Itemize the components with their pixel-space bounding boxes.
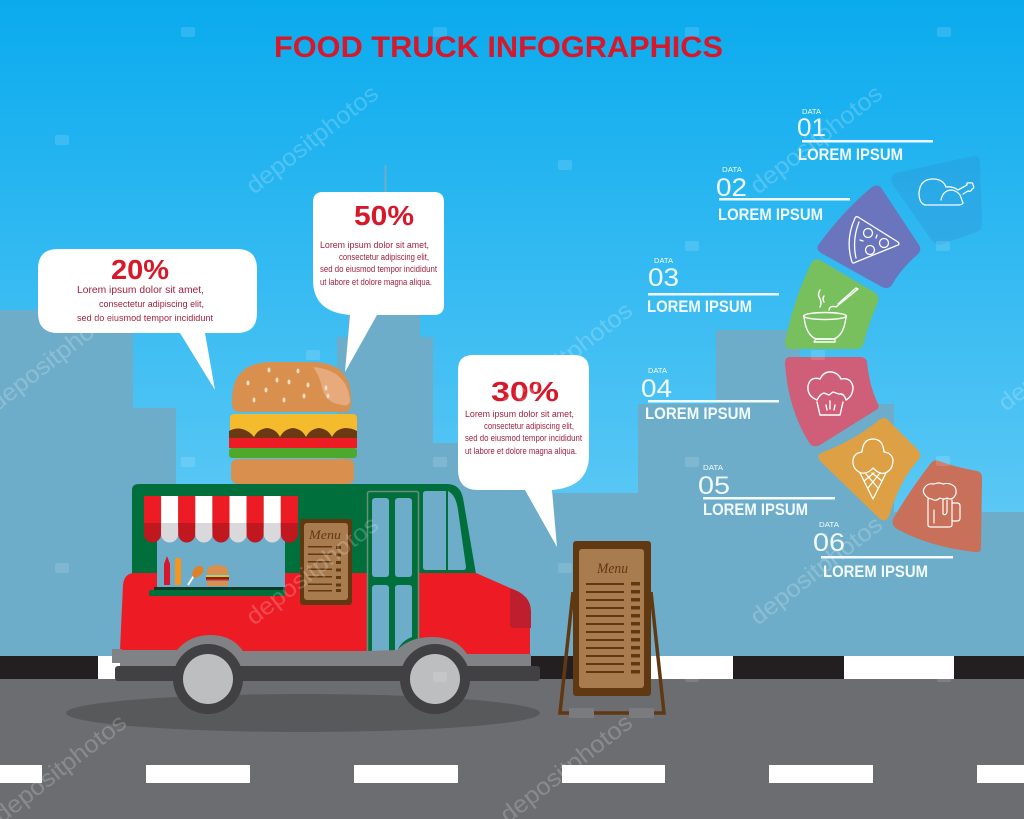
icon: soup bowl — [804, 288, 858, 342]
tail light — [510, 589, 531, 628]
callout: 30% — [458, 355, 589, 547]
data label 04: DATA — [648, 368, 667, 375]
callout: 20%: sed do eiusmod tempor incididunt — [77, 313, 213, 324]
callout: 50%: Lorem ipsum dolor sit amet, — [320, 240, 429, 251]
data label 06 — [813, 522, 953, 581]
sky background — [0, 0, 1024, 520]
sign feet — [569, 708, 654, 718]
data label 05: DATA — [703, 465, 723, 472]
callout: 30%: 30% — [491, 376, 559, 407]
cheese — [230, 414, 357, 438]
callout: 50%: consectetur adipiscing elit, — [339, 252, 429, 263]
callout: 30%: ut labore et dolore magna aliqua. — [465, 446, 577, 457]
icon: chicken — [919, 179, 974, 205]
food truck — [112, 484, 540, 714]
icon: ice cream — [853, 439, 893, 499]
giant burger on roof — [229, 362, 357, 484]
data label 01: LOREM IPSUM — [798, 145, 903, 164]
callout: 50%: sed do eiusmod tempor incididunt — [320, 264, 437, 275]
truck menu board — [300, 519, 352, 605]
data label 04: LOREM IPSUM — [645, 404, 751, 423]
road — [0, 679, 1024, 819]
petal: beer — [892, 460, 982, 552]
data label 02: 02 — [716, 174, 747, 202]
sandwich board menu — [560, 541, 664, 718]
data label 02: DATA — [722, 167, 742, 174]
watermarks: depositphotos — [241, 511, 384, 631]
watermarks: depositphotos — [241, 80, 384, 200]
data label 05: 05 — [698, 472, 730, 500]
data label 01: 01 — [797, 114, 826, 142]
sign legs — [560, 592, 664, 713]
petal: chicken — [891, 156, 982, 245]
data label 03 — [647, 258, 779, 316]
petal: pizza — [817, 185, 920, 288]
data label 03: 03 — [648, 264, 679, 292]
tomato — [229, 438, 357, 448]
watermarks: depositphotos — [495, 297, 638, 417]
curb stripe — [0, 656, 1024, 679]
data label 04 — [641, 368, 779, 423]
data label 06: 06 — [813, 529, 845, 557]
truck skirt and wheel arches — [112, 635, 531, 667]
bumper — [115, 666, 540, 681]
callout: 50% — [313, 192, 444, 372]
callout: 20% — [38, 249, 257, 390]
road dashes — [0, 765, 1024, 783]
truck lower red body — [120, 573, 530, 656]
sign board — [573, 541, 651, 696]
icon: cupcake — [808, 372, 853, 415]
title: FOOD TRUCK INFOGRAPHICS — [274, 31, 723, 64]
truck door — [367, 492, 419, 662]
top bun — [232, 362, 351, 412]
data label 05: LOREM IPSUM — [703, 500, 808, 519]
callout: 20%: 20% — [111, 254, 169, 285]
data label 02 — [716, 167, 850, 224]
petal: cupcake — [785, 357, 879, 446]
petal: soup — [785, 259, 878, 349]
chicken drumstick — [188, 566, 204, 585]
callout: 30%: consectetur adipiscing elit, — [484, 421, 574, 432]
callout: 20%: consectetur adipiscing elit, — [99, 299, 204, 310]
bottom bun — [231, 459, 354, 484]
data label 06: DATA — [819, 522, 839, 529]
data label 01 — [797, 109, 933, 164]
data label 02: LOREM IPSUM — [718, 205, 823, 224]
truck shadow — [66, 694, 540, 732]
icon: beer mug — [923, 483, 960, 527]
service window — [157, 528, 285, 588]
watermarks: depositphotos — [745, 80, 888, 200]
truck upper green body — [132, 484, 476, 575]
data label 06: LOREM IPSUM — [823, 562, 928, 581]
callout: 20%: Lorem ipsum dolor sit amet, — [77, 285, 204, 296]
city skyline — [0, 165, 1024, 660]
patty — [229, 428, 357, 438]
ketchup and mustard bottles — [164, 556, 181, 585]
data label 01: DATA — [802, 109, 821, 116]
callout: 50%: 50% — [354, 200, 414, 231]
awning — [144, 496, 298, 543]
data label 03: DATA — [654, 258, 673, 265]
callout: 30%: Lorem ipsum dolor sit amet, — [465, 409, 574, 420]
lettuce — [229, 448, 357, 458]
truck menu board: Menu — [308, 527, 342, 542]
petal: ice cream — [818, 418, 920, 520]
bun highlight — [313, 367, 350, 405]
mini burger — [206, 565, 229, 586]
data label 05 — [698, 465, 835, 519]
watermark camera marks — [55, 27, 951, 682]
sandwich board menu: Menu — [596, 561, 628, 577]
rear wheel — [173, 644, 243, 714]
callout: 50%: ut labore et dolore magna aliqua. — [320, 277, 432, 288]
icon: pizza — [849, 217, 899, 263]
data label 04: 04 — [641, 375, 672, 403]
sesame seeds — [246, 368, 330, 402]
front wheel — [400, 644, 470, 714]
cab windows — [423, 491, 466, 570]
data label 03: LOREM IPSUM — [647, 297, 752, 316]
callout: 30%: sed do eiusmod tempor incididunt — [465, 433, 582, 444]
counter shelf — [149, 587, 285, 596]
watermarks: depositphotos — [745, 511, 888, 631]
